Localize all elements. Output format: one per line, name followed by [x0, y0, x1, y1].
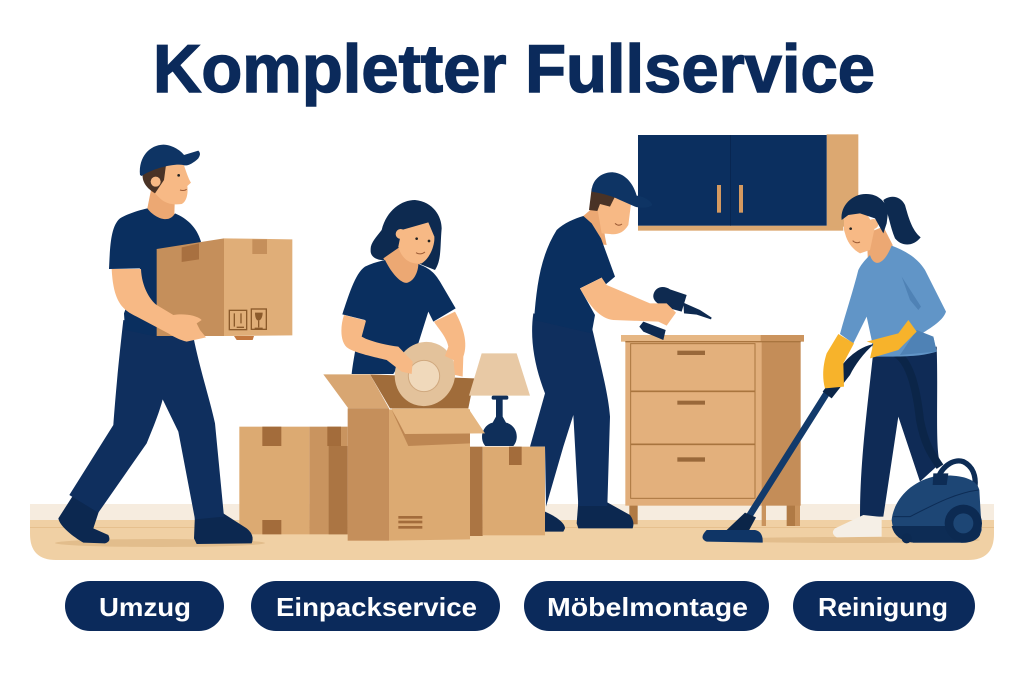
hair [842, 194, 888, 233]
trousers [69, 320, 224, 519]
ear [868, 219, 878, 229]
face [398, 222, 434, 264]
wall cabinet [638, 134, 858, 231]
face [844, 208, 875, 253]
neck [383, 243, 420, 290]
smile [615, 223, 622, 225]
vacuum floor head [702, 513, 763, 543]
lamp [469, 353, 530, 446]
carried box [157, 238, 292, 340]
vacuum body [892, 461, 982, 543]
gloves [823, 320, 917, 388]
ear [151, 177, 161, 187]
vacuum wand [747, 377, 840, 520]
shoe [833, 515, 882, 537]
cap [140, 145, 200, 176]
sweater [840, 246, 946, 357]
cap [592, 172, 652, 208]
shirt [534, 216, 615, 333]
ear [396, 229, 406, 239]
front right cardboard box [470, 447, 545, 536]
boots [545, 502, 633, 532]
ponytail [883, 197, 921, 244]
service label: Möbelmontage [524, 581, 769, 631]
service label: Umzug: Umzug [99, 592, 191, 622]
shirt [109, 208, 201, 337]
hair [589, 188, 615, 211]
face [155, 158, 191, 204]
service label: Möbelmontage: Möbelmontage [547, 592, 748, 622]
back cardboard boxes [239, 427, 348, 534]
drill [639, 287, 712, 340]
service label: Reinigung: Reinigung [818, 592, 948, 622]
service label: Einpackservice [251, 581, 500, 631]
open box interior [370, 374, 474, 408]
arm [112, 269, 206, 342]
smile [853, 241, 860, 243]
boots [58, 495, 253, 544]
title: Kompletter Fullservice [153, 31, 875, 107]
smile [180, 189, 187, 191]
service label: Reinigung [793, 581, 975, 631]
arm [580, 278, 676, 326]
shirt [342, 260, 456, 374]
floor [30, 504, 994, 560]
service label: Umzug [65, 581, 224, 631]
neck [147, 187, 175, 227]
hair [371, 200, 442, 270]
hair [143, 165, 166, 193]
cleaner with vacuum [702, 194, 982, 543]
woman packing plate [341, 200, 474, 415]
vacuum hose [892, 352, 940, 467]
arms [341, 315, 413, 374]
open cardboard box [323, 374, 485, 541]
service label: Einpackservice: Einpackservice [276, 592, 477, 622]
assembler with drill [530, 172, 712, 532]
neck [867, 227, 893, 270]
neck and face [582, 188, 632, 245]
mover carrying box [58, 145, 292, 544]
trousers [530, 313, 610, 507]
plate [386, 333, 464, 415]
smile [416, 252, 425, 254]
trousers [860, 347, 940, 517]
dresser [621, 335, 804, 526]
